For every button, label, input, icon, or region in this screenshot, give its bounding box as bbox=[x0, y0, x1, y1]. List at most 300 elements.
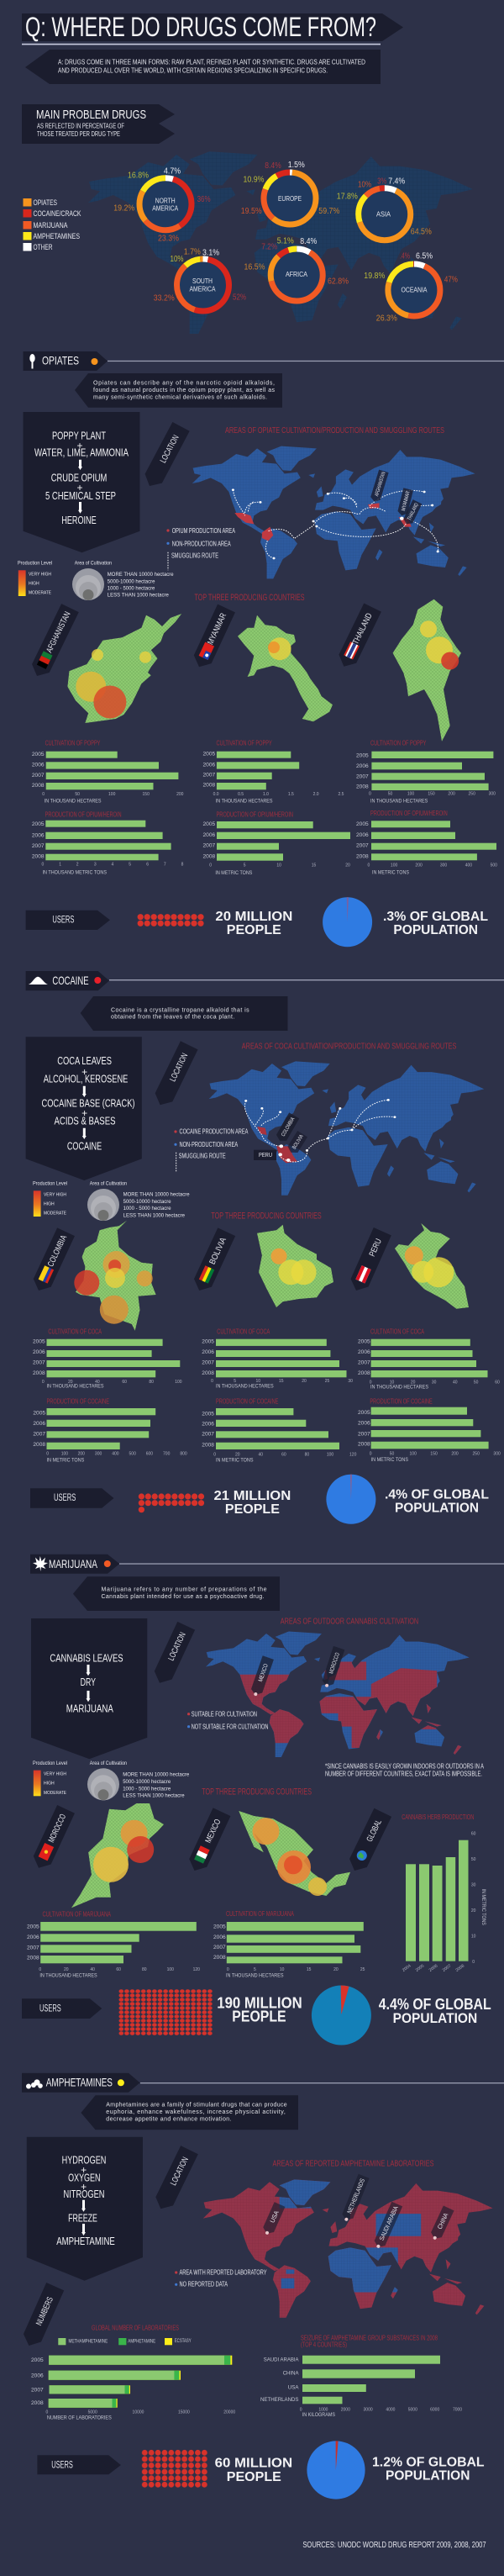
map legend: marijuana: NOT SUITABLE FOR CULTIVATION bbox=[192, 1723, 269, 1731]
bar chart: Thailand poppy cultivation: 2007 bbox=[356, 774, 369, 780]
heading: top three producing countries (cocaine): TOP THREE PRODUCING COUNTRIES bbox=[211, 1211, 322, 1221]
bar chart: Peru coca cultivation: 30 bbox=[432, 1380, 437, 1386]
process panel: amphetamine: + bbox=[81, 2164, 87, 2176]
bar chart: Myanmar poppy cultivation: IN THOUSAND HECTARES bbox=[216, 798, 272, 804]
map tag: Saudi Arabia: SAUDI ARABIA bbox=[378, 2204, 400, 2241]
bar chart: seizures of amphetamine substances: SEIZURE OF AMPHETAMINE GROUP SUBSTANCES IN 2008 bbox=[301, 2334, 438, 2341]
bar chart: Colombia coca cultivation bbox=[33, 1328, 182, 1390]
bar chart: seizures of amphetamine substances: (TOP 4 COUNTRIES) bbox=[301, 2341, 347, 2349]
bar chart: Peru coca cultivation: 10 bbox=[390, 1380, 394, 1386]
bar chart: Afghanistan opium production: 3 bbox=[94, 862, 97, 867]
stacked bar chart: global number of laboratories: 20000 bbox=[223, 2410, 235, 2415]
map tag: Colombia bbox=[275, 1112, 299, 1143]
bar chart: Morocco marijuana cultivation: 2005 bbox=[27, 1924, 39, 1929]
process panel: cocaine: COCAINE BASE (CRACK) bbox=[42, 1097, 134, 1110]
bar chart: Myanmar opium production: 0 bbox=[209, 863, 212, 868]
users row: amphetamines: 60 MILLION bbox=[215, 2456, 292, 2470]
stacked bar chart: global number of laboratories: 2005 bbox=[31, 2357, 44, 2363]
world map: opiate routes bbox=[192, 446, 475, 578]
bar chart: cannabis herb production: 2005 bbox=[415, 1963, 425, 1973]
ring chart: Africa bbox=[244, 236, 349, 301]
bar chart: Bolivia cocaine production: 0 bbox=[213, 1452, 216, 1457]
bar chart: Thailand opium production: 500 bbox=[491, 863, 497, 868]
stacked bar chart: global number of laboratories: 0 bbox=[46, 2410, 49, 2415]
bar chart: Thailand poppy cultivation: 200 bbox=[448, 792, 455, 797]
map legend: cocaine: NON-PRODUCTION AREA bbox=[180, 1141, 239, 1148]
bar chart: Thailand poppy cultivation: 2008 bbox=[356, 784, 369, 790]
bar chart: Myanmar opium production: 2008 bbox=[203, 853, 216, 859]
stacked bar chart: global number of laboratories bbox=[31, 2325, 235, 2420]
legend: production level and cultivation area (cocaine): 5000-10000 hectacre bbox=[123, 1199, 171, 1205]
users row: opiates: POPULATION bbox=[393, 923, 478, 937]
bar chart: Bolivia cocaine production: IN METRIC TONS bbox=[216, 1458, 254, 1464]
users row: amphetamines: POPULATION bbox=[386, 2468, 470, 2483]
ring chart: North America: 4.7% bbox=[164, 167, 181, 177]
legend: drug types: MARIJUANA bbox=[34, 221, 67, 230]
bar chart: Myanmar poppy cultivation: 2005 bbox=[203, 752, 216, 757]
bar chart: seizures of amphetamine substances: 1000 bbox=[318, 2407, 328, 2412]
bar chart: Bolivia coca cultivation: 2006 bbox=[202, 1349, 214, 1355]
legend: production level and cultivation area (marijuana): HIGH bbox=[44, 1782, 55, 1787]
tag: Myanmar bbox=[191, 604, 235, 671]
bar chart: Thailand poppy cultivation: 250 bbox=[469, 792, 475, 797]
ring chart: South America: 1.7% bbox=[184, 248, 201, 257]
map legend: opiates: NON-PRODUCTION AREA bbox=[172, 540, 231, 547]
legend: production level and cultivation area (opiates): MORE THAN 10000 hectacre bbox=[108, 572, 174, 578]
tag: Peru: PERU bbox=[368, 1238, 384, 1258]
users row: marijuana: PEOPLE bbox=[232, 2009, 286, 2025]
bar chart: Thailand poppy cultivation: 50 bbox=[388, 792, 392, 797]
bar chart: Colombia cocaine production: 0 bbox=[46, 1452, 49, 1457]
legend: drug types bbox=[24, 198, 81, 251]
legend: production level and cultivation area (marijuana): MORE THAN 10000 hectacre bbox=[123, 1772, 190, 1778]
ring chart: Oceania: .4% bbox=[400, 252, 410, 261]
bar chart: Morocco marijuana cultivation: 100 bbox=[167, 1967, 174, 1972]
bar chart: Myanmar opium production: 20 bbox=[345, 863, 350, 868]
ring chart: Asia: ASIA bbox=[376, 210, 391, 219]
bar chart: Peru coca cultivation: 60 bbox=[495, 1380, 500, 1386]
bar chart: cannabis herb production: 10 bbox=[471, 1935, 476, 1940]
tag: Morocco: MOROCCO bbox=[47, 1813, 68, 1845]
ring chart: Asia bbox=[337, 177, 432, 240]
bar chart: Colombia coca cultivation: 2005 bbox=[33, 1339, 45, 1345]
bar chart: Colombia cocaine production: 300 bbox=[95, 1452, 102, 1457]
bar chart: Peru coca cultivation: 50 bbox=[474, 1380, 479, 1386]
bar chart: cannabis herb production: 50 bbox=[471, 1857, 476, 1862]
opiates description: Opiates can describe any of the narcotic opioid alkaloids, bbox=[93, 380, 275, 387]
ring chart: Asia: 10% bbox=[358, 181, 371, 190]
bar chart: Myanmar opium production: 15 bbox=[312, 863, 316, 868]
section header: amphetamines bbox=[22, 2073, 504, 2093]
bar chart: Morocco marijuana cultivation: 2007 bbox=[27, 1945, 39, 1950]
process panel: amphetamine: HYDROGEN bbox=[62, 2153, 106, 2166]
bar chart: Colombia cocaine production: 400 bbox=[112, 1452, 119, 1457]
bar chart: Bolivia cocaine production: 80 bbox=[305, 1452, 309, 1457]
tag: location (marijuana): LOCATION bbox=[167, 1631, 188, 1662]
bar chart: Peru cocaine production: 2008 bbox=[358, 1441, 370, 1447]
map tag: Peru bbox=[254, 1150, 276, 1160]
bar chart: Afghanistan opium production bbox=[32, 810, 184, 875]
bar chart: Bolivia coca cultivation: 30 bbox=[348, 1379, 353, 1384]
opiates description bbox=[75, 373, 282, 408]
bar chart: cannabis herb production: 2007 bbox=[442, 1963, 452, 1973]
bar chart: Myanmar opium production: 10 bbox=[276, 863, 281, 868]
heading: main problem drugs: AS REFLECTED IN PERCENTAGE OF bbox=[37, 123, 124, 130]
ring chart: Oceania bbox=[364, 252, 458, 324]
heading: top three producing countries (opiates): TOP THREE PRODUCING COUNTRIES bbox=[195, 593, 304, 603]
bar chart: seizures of amphetamine substances: 6000 bbox=[430, 2407, 439, 2412]
bar chart: Thailand opium production: 400 bbox=[465, 863, 472, 868]
bar chart: Afghanistan opium production: PRODUCTION OF OPIUM/HEROIN bbox=[45, 810, 122, 818]
legend: production level and cultivation area (opiates): LESS THAN 1000 hectacre bbox=[108, 592, 169, 598]
process panel: marijuana bbox=[31, 1618, 147, 1759]
bar chart: Afghanistan poppy cultivation: CULTIVATION OF POPPY bbox=[45, 740, 101, 747]
map legend: opiates bbox=[166, 527, 235, 570]
tag: Afghanistan bbox=[29, 604, 79, 680]
legend: production level and cultivation area (cocaine): VERY HIGH bbox=[44, 1192, 66, 1197]
bar chart: Thailand opium production: IN METRIC TONS bbox=[372, 869, 409, 875]
ring chart: Europe: EUROPE bbox=[278, 194, 302, 203]
users row: opiates bbox=[26, 897, 488, 947]
ring chart: South America: 33.2% bbox=[154, 293, 175, 303]
marijuana description bbox=[73, 1576, 280, 1611]
legend: production level and cultivation area (marijuana): LESS THAN 1000 hectacre bbox=[123, 1792, 185, 1798]
bar chart: seizures of amphetamine substances: SAUDI ARABIA bbox=[264, 2357, 299, 2363]
bar chart: Bolivia cocaine production: 2008 bbox=[202, 1442, 214, 1448]
bar chart: Bolivia cocaine production: 2007 bbox=[202, 1431, 214, 1437]
amphetamines description: Amphetamines are a family of stimulant drugs that can produce bbox=[106, 2102, 287, 2108]
ring chart: Oceania: 26.3% bbox=[376, 314, 397, 324]
ring chart: Asia: 64.5% bbox=[411, 227, 432, 236]
bar chart: Bolivia coca cultivation bbox=[202, 1328, 353, 1390]
bar chart: Thailand opium production: 300 bbox=[440, 863, 447, 868]
ring chart: South America: 10% bbox=[170, 255, 184, 264]
legend: production level and cultivation area (opiates): 5000-10000 hectacre bbox=[108, 578, 155, 584]
users row: cocaine: USERS bbox=[54, 1491, 76, 1503]
tag: location (cocaine) bbox=[151, 1041, 198, 1109]
bar chart: Afghanistan poppy cultivation: IN THOUSAND HECTARES bbox=[45, 798, 101, 804]
bar chart: seizures of amphetamine substances: 2000 bbox=[341, 2407, 350, 2412]
bar chart: Bolivia coca cultivation: 2008 bbox=[202, 1370, 214, 1376]
bar chart: Afghanistan poppy cultivation: 100 bbox=[108, 792, 116, 797]
legend: production level and cultivation area (cocaine): MORE THAN 10000 hectacre bbox=[123, 1192, 190, 1198]
map: Mexico bbox=[239, 1811, 350, 1896]
map tag: USA: USA bbox=[268, 2209, 281, 2224]
process panel: cocaine: COCAINE bbox=[67, 1140, 102, 1153]
bar chart: Colombia coca cultivation: 80 bbox=[149, 1380, 154, 1385]
process panel: marijuana: MARIJUANA bbox=[66, 1702, 113, 1715]
process panel: amphetamine: NITROGEN bbox=[64, 2188, 104, 2200]
legend: drug types: OPIATES bbox=[34, 198, 57, 207]
bar chart: Mexico marijuana cultivation: 2008 bbox=[213, 1955, 226, 1961]
bar chart: cannabis herb production: 2008 bbox=[454, 1963, 465, 1973]
ring chart: Europe: 10.9% bbox=[244, 176, 265, 185]
process panel: heroine: POPPY PLANT bbox=[52, 430, 106, 442]
bar chart: Myanmar opium production: 2005 bbox=[203, 821, 216, 827]
bar chart: seizures of amphetamine substances: NETHERLANDS bbox=[260, 2397, 299, 2403]
users row: opiates: 20 MILLION bbox=[215, 910, 292, 924]
map tag: Thailand bbox=[402, 499, 422, 526]
map legend: cocaine bbox=[174, 1128, 249, 1171]
process panel: heroine: + bbox=[76, 440, 83, 451]
bar chart: Colombia cocaine production: 2007 bbox=[33, 1431, 45, 1437]
legend: production level and cultivation area (marijuana) bbox=[33, 1761, 190, 1800]
bar chart: Thailand opium production: 200 bbox=[415, 863, 423, 868]
legend: production level and cultivation area (cocaine) bbox=[33, 1182, 190, 1221]
process panel: cocaine: + bbox=[81, 1066, 87, 1078]
map tag: Netherlands bbox=[340, 2174, 370, 2223]
bar chart: Thailand poppy cultivation: 2005 bbox=[356, 753, 369, 759]
world map: reported laboratories bbox=[203, 2179, 493, 2318]
bar chart: Peru coca cultivation: 2007 bbox=[358, 1359, 370, 1365]
bar chart: Colombia coca cultivation: 2006 bbox=[33, 1349, 45, 1355]
ring chart: North America: NORTH bbox=[155, 197, 176, 205]
ring chart: Europe bbox=[241, 161, 339, 224]
amphetamines description: euphoria, enhance wakefulness, increase physical activity, bbox=[106, 2109, 286, 2115]
heading: top three producing countries (marijuana): TOP THREE PRODUCING COUNTRIES bbox=[202, 1787, 312, 1797]
process panel: heroine bbox=[24, 412, 139, 552]
ring chart: Africa: 62.8% bbox=[328, 277, 349, 286]
process panel: cocaine bbox=[26, 1037, 142, 1180]
bar chart: Myanmar poppy cultivation bbox=[203, 740, 344, 804]
map tag: Bolivia bbox=[286, 1131, 307, 1155]
ring chart: Asia: 17.8% bbox=[337, 193, 358, 202]
map: Morocco bbox=[71, 1803, 164, 1908]
bar chart: Myanmar opium production bbox=[203, 810, 350, 876]
ring chart: Africa: 16.5% bbox=[244, 263, 265, 272]
bar chart: Peru coca cultivation: 2005 bbox=[358, 1339, 370, 1345]
users row: amphetamines: 1.2% OF GLOBAL bbox=[372, 2455, 485, 2469]
marijuana description: Cannabis plant intended for use as a psychoactive drug. bbox=[101, 1594, 265, 1600]
bar chart: seizures of amphetamine substances bbox=[260, 2334, 462, 2418]
bar chart: Colombia coca cultivation: IN THOUSAND HECTARES bbox=[47, 1384, 104, 1390]
users row: amphetamines bbox=[37, 2441, 485, 2499]
stacked bar chart: global number of laboratories: 10000 bbox=[133, 2410, 144, 2415]
section header: opiates bbox=[24, 351, 504, 371]
bar chart: Morocco marijuana cultivation: 80 bbox=[142, 1967, 147, 1972]
map: Thailand bbox=[393, 599, 461, 742]
users row: marijuana: 190 MILLION bbox=[217, 1994, 302, 2011]
title banner: Q: WHERE DO DRUGS COME FROM? bbox=[25, 12, 376, 42]
ring chart: Africa: 8.4% bbox=[300, 237, 317, 246]
bar chart: Myanmar poppy cultivation: 0.5 bbox=[238, 792, 244, 797]
bar chart: Peru coca cultivation: IN THOUSAND HECTARES bbox=[370, 1385, 428, 1391]
bar chart: Morocco marijuana cultivation: IN THOUSAND HECTARES bbox=[39, 1973, 97, 1979]
ring chart: South America: SOUTH bbox=[192, 277, 213, 285]
bar chart: Bolivia cocaine production: 100 bbox=[327, 1452, 333, 1457]
legend: production level and cultivation area (marijuana): 5000-10000 hectacre bbox=[123, 1779, 171, 1785]
ring chart: Africa: 5.1% bbox=[277, 236, 294, 245]
stacked bar chart: global number of laboratories: ECSTASY bbox=[175, 2338, 192, 2344]
bar chart: Afghanistan poppy cultivation: 2006 bbox=[32, 763, 45, 768]
bar chart: Peru cocaine production: 150 bbox=[430, 1452, 438, 1457]
bar chart: seizures of amphetamine substances: 7000 bbox=[453, 2407, 462, 2412]
bar chart: Colombia cocaine production: 800 bbox=[180, 1452, 187, 1457]
bar chart: Bolivia cocaine production: 2005 bbox=[202, 1411, 214, 1417]
bar chart: Afghanistan poppy cultivation: 200 bbox=[176, 792, 184, 797]
bar chart: Afghanistan opium production: 2 bbox=[76, 862, 79, 867]
bar chart: Morocco marijuana cultivation: 120 bbox=[193, 1967, 200, 1972]
stacked bar chart: global number of laboratories: NUMBER OF LABORATORIES bbox=[47, 2415, 112, 2420]
section header: marijuana bbox=[30, 1555, 504, 1574]
map tag: China bbox=[429, 2205, 454, 2242]
section header: marijuana: MARIJUANA bbox=[49, 1557, 97, 1570]
bar chart: Afghanistan opium production: 2007 bbox=[32, 843, 45, 849]
bar chart: Afghanistan poppy cultivation: 2007 bbox=[32, 773, 45, 779]
bar chart: Myanmar opium production: IN METRIC TONS bbox=[215, 870, 252, 876]
bar chart: Myanmar opium production: PRODUCTION OF OPIUM/HEROIN bbox=[217, 810, 293, 818]
map tag: Myanmar bbox=[396, 488, 413, 517]
bar chart: seizures of amphetamine substances: 5000 bbox=[408, 2407, 417, 2412]
bar chart: Myanmar poppy cultivation: 0.0 bbox=[213, 792, 219, 797]
bar chart: Colombia cocaine production: 700 bbox=[163, 1452, 171, 1457]
stacked bar chart: global number of laboratories: 15000 bbox=[178, 2410, 190, 2415]
bar chart: Morocco marijuana cultivation: CULTIVATION OF MARIJUANA bbox=[42, 1910, 111, 1918]
legend: production level and cultivation area (opiates): 1000 - 5000 hectacre bbox=[108, 585, 155, 591]
tag: Thailand: THAILAND bbox=[351, 612, 375, 646]
map title: amphetamines: AREAS OF REPORTED AMPHETAMINE LABORATORIES bbox=[272, 2160, 434, 2169]
bar chart: Myanmar poppy cultivation: 2006 bbox=[203, 762, 216, 768]
map legend: marijuana bbox=[187, 1710, 269, 1731]
ring chart: South America: 3.1% bbox=[202, 248, 219, 257]
bar chart: Thailand poppy cultivation: 300 bbox=[489, 792, 496, 797]
bar chart: Mexico marijuana cultivation bbox=[213, 1910, 365, 1979]
bar chart: Afghanistan opium production: 7 bbox=[164, 862, 166, 867]
bar chart: Bolivia coca cultivation: 10 bbox=[256, 1379, 260, 1384]
bar chart: Morocco marijuana cultivation: 0 bbox=[39, 1967, 41, 1972]
process panel: cocaine: + bbox=[81, 1107, 87, 1119]
amphetamines description bbox=[81, 2095, 298, 2130]
tag: Thailand bbox=[335, 604, 381, 671]
tag: Mexico bbox=[186, 1808, 230, 1875]
process panel: heroine: + bbox=[76, 482, 83, 494]
users row: marijuana: 4.4% OF GLOBAL bbox=[379, 1996, 491, 2013]
map tag: USA bbox=[261, 2202, 285, 2236]
users row: cocaine bbox=[30, 1475, 489, 1524]
users row: amphetamines: PEOPLE bbox=[227, 2470, 281, 2484]
bar chart: Bolivia coca cultivation: 20 bbox=[302, 1379, 307, 1384]
bar chart: cannabis herb production: 2004 bbox=[402, 1963, 412, 1973]
bar chart: Colombia cocaine production: 100 bbox=[61, 1452, 68, 1457]
bar chart: Mexico marijuana cultivation: 20 bbox=[333, 1967, 339, 1972]
ring chart: Asia: 3% bbox=[377, 177, 386, 186]
bar chart: Mexico marijuana cultivation: 10 bbox=[280, 1967, 285, 1972]
tag: location (amphetamines) bbox=[152, 2146, 198, 2213]
users row: opiates: .3% OF GLOBAL bbox=[383, 910, 488, 924]
world map: cannabis suitability bbox=[206, 1632, 470, 1757]
ring chart: Europe: 8.4% bbox=[265, 161, 281, 171]
ring chart: Europe: 59.7% bbox=[318, 207, 339, 216]
bar chart: Thailand opium production: 2006 bbox=[356, 832, 369, 838]
bar chart: Thailand opium production: 2008 bbox=[356, 853, 369, 859]
section header: amphetamines: AMPHETAMINES bbox=[46, 2076, 113, 2089]
tag: location (marijuana) bbox=[151, 1622, 195, 1687]
bar chart: Afghanistan opium production: 8 bbox=[181, 862, 184, 867]
bar chart: Colombia cocaine production: PRODUCTION OF COCAINE bbox=[47, 1397, 109, 1405]
bar chart: Peru cocaine production: 50 bbox=[390, 1452, 394, 1457]
legend: production level and cultivation area (cocaine): Area of Cultivation bbox=[90, 1182, 127, 1187]
bar chart: Colombia coca cultivation: 2008 bbox=[33, 1370, 45, 1376]
process panel: amphetamine: FREEZE bbox=[68, 2212, 97, 2225]
section header: cocaine bbox=[26, 971, 504, 990]
bar chart: Mexico marijuana cultivation: 0 bbox=[227, 1967, 229, 1972]
bar chart: Peru coca cultivation bbox=[358, 1328, 500, 1391]
process panel: amphetamine: + bbox=[81, 2181, 87, 2193]
bar chart: Colombia coca cultivation: 40 bbox=[95, 1380, 100, 1385]
bar chart: Afghanistan opium production: 2005 bbox=[32, 821, 45, 827]
legend: drug types: OTHER bbox=[34, 243, 53, 251]
bar chart: Bolivia cocaine production: 20 bbox=[235, 1452, 240, 1457]
bar chart: Peru cocaine production: 0 bbox=[370, 1452, 372, 1457]
bar chart: Bolivia coca cultivation: 2007 bbox=[202, 1359, 214, 1365]
bar chart: Thailand opium production: 0 bbox=[368, 863, 370, 868]
legend: production level and cultivation area (cocaine): MODERATE bbox=[44, 1211, 67, 1217]
bar chart: Peru cocaine production: 300 bbox=[493, 1452, 501, 1457]
bar chart: seizures of amphetamine substances: 3000 bbox=[364, 2407, 373, 2412]
bar chart: Mexico marijuana cultivation: 2005 bbox=[213, 1924, 226, 1929]
map tag: Saudi Arabia bbox=[372, 2202, 402, 2250]
cocaine description bbox=[81, 996, 287, 1031]
map title: marijuana: AREAS OF OUTDOOR CANNABIS CULTIVATION bbox=[281, 1618, 418, 1627]
tag: Afghanistan: AFGHANISTAN bbox=[45, 610, 73, 654]
bar chart: Morocco marijuana cultivation bbox=[27, 1910, 200, 1979]
bar chart: Morocco marijuana cultivation: 60 bbox=[116, 1967, 121, 1972]
bar chart: cannabis herb production: 30 bbox=[471, 1883, 476, 1888]
legend: production level and cultivation area (opiates): MODERATE bbox=[29, 591, 52, 596]
users row: cocaine: .4% OF GLOBAL bbox=[385, 1488, 489, 1502]
bar chart: Colombia coca cultivation: 0 bbox=[42, 1380, 45, 1385]
bar chart: Thailand poppy cultivation bbox=[356, 740, 496, 804]
ring chart: Africa: AFRICA bbox=[286, 270, 307, 278]
map tag: Mexico bbox=[249, 1655, 274, 1697]
bar chart: seizures of amphetamine substances: 0 bbox=[300, 2407, 302, 2412]
process panel: marijuana: DRY bbox=[81, 1676, 96, 1688]
opiates description: many semi-synthetic chemical derivatives of such alkaloids. bbox=[93, 395, 267, 401]
bar chart: Colombia cocaine production: IN METRIC TONS bbox=[47, 1458, 84, 1464]
bar chart: Afghanistan opium production: 6 bbox=[146, 862, 149, 867]
world map: cocaine bbox=[209, 1061, 484, 1196]
ring chart: South America bbox=[154, 248, 246, 311]
bar chart: Mexico marijuana cultivation: 5 bbox=[254, 1967, 256, 1972]
bar chart: Colombia cocaine production bbox=[33, 1397, 187, 1464]
map tag: China: CHINA bbox=[436, 2212, 449, 2230]
map tag: Morocco bbox=[321, 1646, 344, 1689]
map: Myanmar bbox=[238, 615, 333, 721]
map tag: Netherlands: NETHERLANDS bbox=[345, 2177, 366, 2214]
answer intro panel: AND PRODUCED ALL OVER THE WORLD, WITH CERTAIN REGIONS SPECIALIZING IN SPECIFIC DRUGS. bbox=[58, 66, 328, 74]
map legend: cocaine: COCAINE PRODUCTION AREA bbox=[180, 1128, 249, 1136]
bar chart: Colombia coca cultivation: CULTIVATION OF COCA bbox=[48, 1328, 102, 1336]
stacked bar chart: global number of laboratories: 5000 bbox=[88, 2410, 97, 2415]
bar chart: cannabis herb production: CANNABIS HERB PRODUCTION bbox=[402, 1813, 474, 1821]
legend: production level and cultivation area (opiates): VERY HIGH bbox=[29, 572, 51, 577]
bar chart: Peru cocaine production: 250 bbox=[473, 1452, 480, 1457]
users row: marijuana bbox=[22, 1985, 491, 2045]
bar chart: Afghanistan poppy cultivation: 2005 bbox=[32, 752, 45, 757]
bar chart: Bolivia cocaine production: 40 bbox=[259, 1452, 263, 1457]
bar chart: Thailand poppy cultivation: IN THOUSAND HECTARES bbox=[370, 798, 428, 804]
process panel: amphetamine bbox=[27, 2137, 143, 2281]
bar chart: Afghanistan opium production: 2008 bbox=[32, 854, 45, 860]
ring chart: South America: AMERICA bbox=[190, 285, 216, 293]
bar chart: Peru coca cultivation: 2006 bbox=[358, 1349, 370, 1355]
process panel: cocaine: ALCOHOL, KEROSENE bbox=[44, 1072, 129, 1085]
users row: marijuana: USERS bbox=[39, 2002, 61, 2014]
bar chart: Thailand poppy cultivation: 100 bbox=[407, 792, 414, 797]
bar chart: Peru coca cultivation: CULTIVATION OF COCA bbox=[370, 1328, 424, 1336]
tag: location (opiates): LOCATION bbox=[159, 434, 181, 465]
map tag: Bolivia: BOLIVIA bbox=[291, 1133, 305, 1150]
